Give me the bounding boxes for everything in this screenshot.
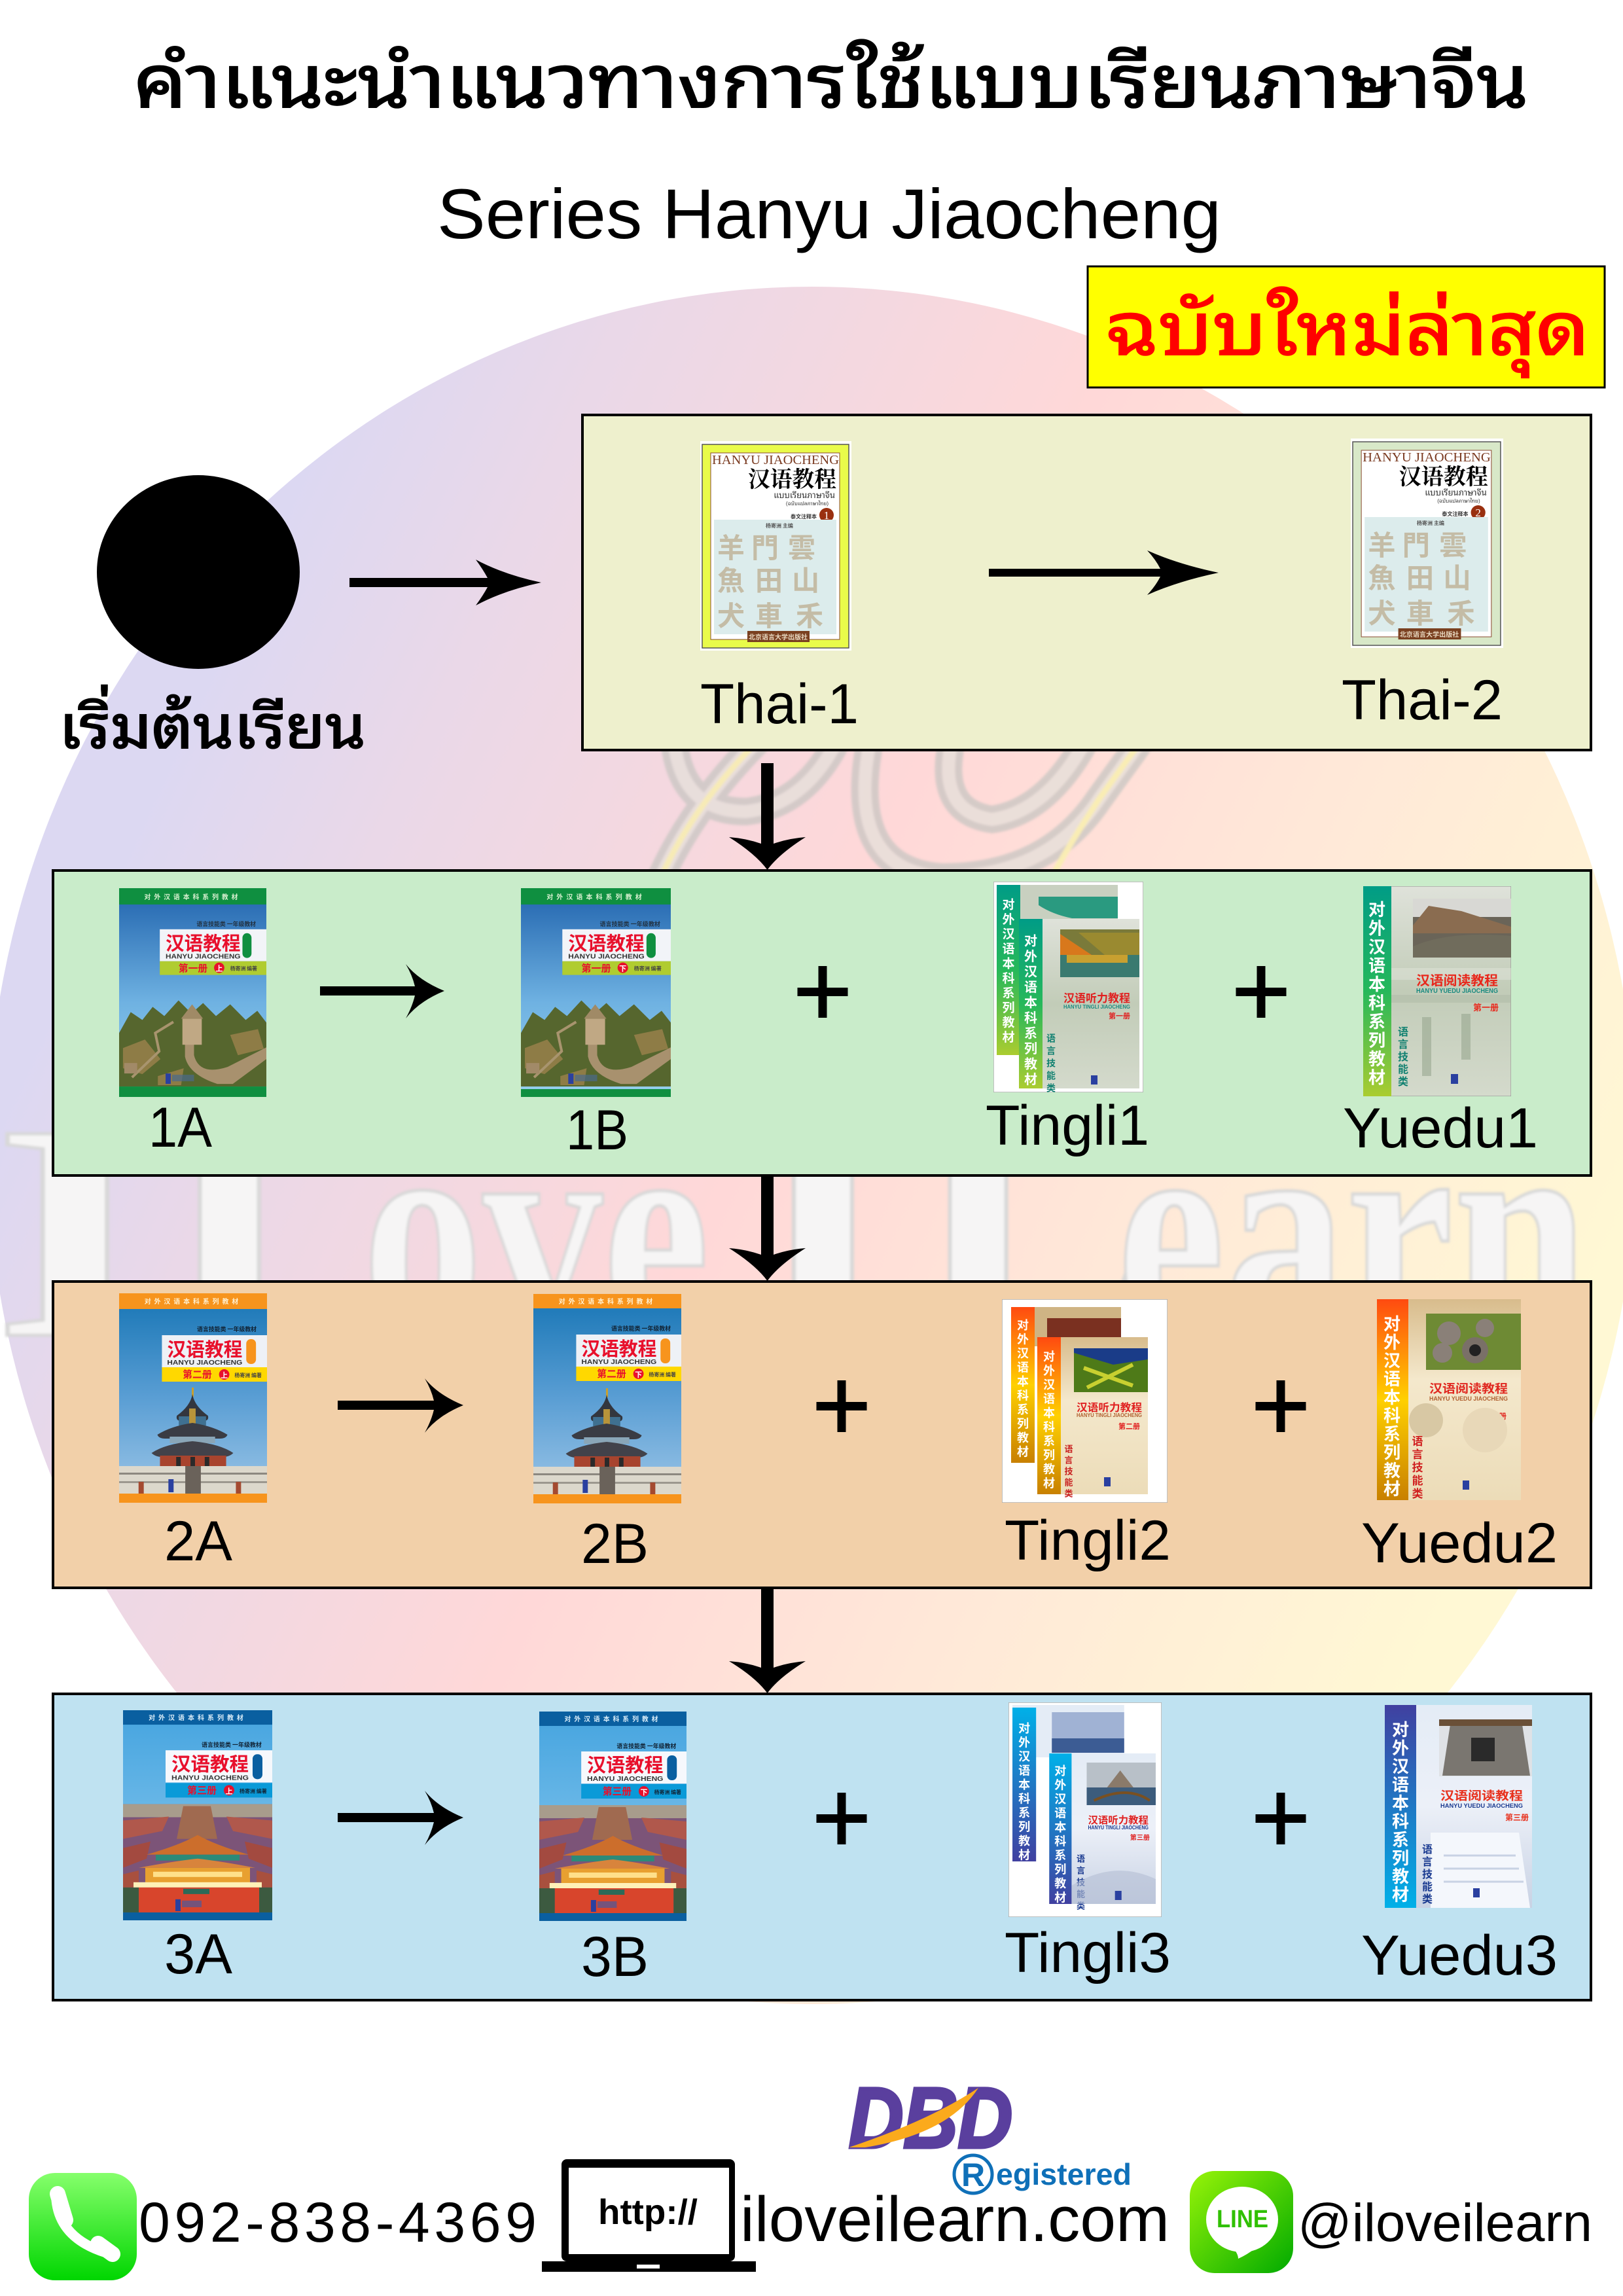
book: Tingli2 covers xyxy=(1002,1299,1168,1503)
book: Thai-1 cover: 雲 xyxy=(788,533,815,564)
book: Yuedu2 cover: 语言技能类 xyxy=(1410,1435,1425,1501)
book: Thai-2 cover xyxy=(1351,439,1503,648)
book: Thai-1 cover: 羊 xyxy=(717,533,745,564)
label: 1A: 1A xyxy=(149,1096,213,1159)
arrow: 1A to 1B xyxy=(320,964,444,1018)
book: 2A cover: 杨寄洲 编著 xyxy=(234,1372,262,1379)
arrow: Thai panel to level 1 xyxy=(729,763,806,870)
book: Tingli3 covers: 汉语听力教程 xyxy=(1088,1813,1149,1827)
book: 3B cover: 语言技能类 一年级教材 xyxy=(616,1742,676,1750)
book: 3B cover: 对外汉语本科系列教材 xyxy=(565,1713,661,1723)
book: Yuedu1 cover xyxy=(1363,886,1511,1096)
label: 3B: 3B xyxy=(581,1926,649,1988)
label: Yuedu1: Yuedu1 xyxy=(1343,1097,1538,1160)
book: Tingli2 covers: 第二册 xyxy=(1118,1421,1140,1431)
badge: latest edition xyxy=(1088,266,1605,387)
book: Tingli2 covers: HANYU TINGLI JIAOCHENG xyxy=(1077,1412,1142,1418)
icon: plus between 3B and Tingli3 xyxy=(817,1793,866,1844)
book: 3B cover: 杨寄洲 编著 xyxy=(654,1789,681,1796)
book: Thai-1 cover: 杨寄洲 主编 xyxy=(766,522,793,529)
book: 1A cover: HANYU JIAOCHENG xyxy=(166,954,241,961)
book: 1B cover: 对外汉语本科系列教材 xyxy=(546,891,645,901)
book: Yuedu1 cover: HANYU YUEDU JIAOCHENG xyxy=(1416,988,1498,995)
book: Tingli1 covers xyxy=(993,882,1143,1096)
label: Yuedu3: Yuedu3 xyxy=(1361,1924,1558,1987)
book: 2A cover: 对外汉语本科系列教材 xyxy=(145,1296,241,1306)
book: Thai-2 cover: 雲 xyxy=(1439,530,1467,561)
book: Thai-1 cover: 北京语言大学出版社 xyxy=(749,632,808,641)
book: 1B cover xyxy=(521,888,671,1097)
book: Tingli1 covers: 汉语听力教程 xyxy=(1063,989,1130,1005)
watermark: script logo xyxy=(661,740,1142,877)
book: Tingli2 covers: 汉语听力教程 xyxy=(1077,1399,1142,1414)
book: 3A cover: 对外汉语本科系列教材 xyxy=(149,1712,247,1722)
badge: latest edition: ฉบับใหม่ล่าสุด xyxy=(1106,286,1590,378)
book: Thai-2 cover: 田 xyxy=(1406,563,1434,594)
registered mark: egistered xyxy=(996,2157,1132,2191)
book: 2B cover xyxy=(533,1294,681,1503)
arrow: 3A to 3B xyxy=(338,1791,463,1845)
book: 1A cover: 汉语教程 xyxy=(166,929,241,956)
book: 1B cover: 杨寄洲 编著 xyxy=(634,965,662,973)
book: Tingli3 covers xyxy=(1008,1702,1162,1917)
book: Thai-1 cover: 田 xyxy=(755,565,783,596)
book: Thai-1 cover: 魚 xyxy=(717,565,745,596)
book: 1B cover: HANYU JIAOCHENG xyxy=(568,953,645,961)
book: Yuedu2 cover: HANYU YUEDU JIAOCHENG xyxy=(1429,1395,1508,1402)
book: Thai-2 cover: 山 xyxy=(1443,563,1471,594)
book: Thai-2 cover: 犬 xyxy=(1368,598,1396,629)
book: 3A cover: 上 xyxy=(226,1785,232,1796)
website: iloveilearn.com xyxy=(740,2183,1169,2255)
arrow: level 1 to level 2 xyxy=(729,1175,806,1281)
book: 1A cover: 对外汉语本科系列教材 xyxy=(145,892,241,901)
watermark: I Love I Learn: L xyxy=(913,1061,1157,1402)
watermark: I Love I Learn: ove xyxy=(363,1061,709,1402)
book: Tingli1 covers: 对外汉语本科系列教材 xyxy=(1000,898,1017,1045)
book: 1B cover: 第一册 xyxy=(581,961,611,975)
phone number: 092-838-4369 xyxy=(139,2191,537,2254)
book: Thai-2 cover: 羊 xyxy=(1368,530,1396,561)
book: 3A cover: 杨寄洲 编著 xyxy=(240,1787,267,1795)
logo: DBD: DBD xyxy=(849,2070,1012,2166)
book: 3A cover: 汉语教程 xyxy=(171,1749,249,1776)
panel: level 3 books xyxy=(53,1694,1591,2000)
book: Tingli2 covers: 对外汉语本科系列教材 xyxy=(1014,1319,1031,1460)
book: Thai-2 cover: 泰文注释本 xyxy=(1442,511,1469,518)
label: Tingli1: Tingli1 xyxy=(986,1094,1149,1157)
book: Thai-2 cover: 2 xyxy=(1475,507,1481,519)
book: Thai-2 cover: 汉语教程 xyxy=(1399,459,1488,491)
label: 1B: 1B xyxy=(566,1099,628,1162)
book: Thai-1 cover: HANYU JIAOCHENG xyxy=(712,453,839,467)
label: Thai-1: Thai-1 xyxy=(700,673,859,736)
book: 3B cover: HANYU JIAOCHENG xyxy=(587,1776,663,1783)
arrow: start to Thai panel xyxy=(349,560,541,605)
arrow: Thai-1 to Thai-2 xyxy=(989,550,1219,595)
book: 1A cover: 第一册 xyxy=(179,961,207,975)
book: 3A cover: 语言技能类 一年级教材 xyxy=(202,1740,262,1749)
book: Tingli3 covers: 对外汉语本科系列教材 xyxy=(1016,1722,1033,1863)
registered mark xyxy=(954,2155,1132,2193)
label: Tingli3: Tingli3 xyxy=(1005,1922,1171,1984)
book: Yuedu1 cover: 语言技能类 xyxy=(1395,1026,1411,1088)
book: Tingli1 covers: HANYU TINGLI JIAOCHENG xyxy=(1063,1003,1130,1010)
book: 3B cover xyxy=(539,1712,687,1921)
panel: level 2 books xyxy=(53,1282,1591,1588)
label: Yuedu2: Yuedu2 xyxy=(1361,1512,1558,1575)
arrow: level 2 to level 3 xyxy=(729,1588,806,1693)
registered mark: R xyxy=(961,2157,985,2193)
book: Yuedu3 cover xyxy=(1385,1705,1532,1908)
watermark: I Love I Learn: L xyxy=(161,1062,418,1402)
book: Thai-2 cover: 禾 xyxy=(1447,598,1475,629)
book: Tingli3 covers: 语言技能类 xyxy=(1075,1854,1087,1913)
icon: LINE: LINE xyxy=(1217,2206,1268,2233)
book: 2A cover: 第二册 xyxy=(183,1367,212,1381)
icon: LINE xyxy=(1190,2171,1293,2273)
book: 3A cover: 第三册 xyxy=(187,1783,217,1797)
book: 2B cover: 杨寄洲 编著 xyxy=(649,1371,676,1378)
icon: plus between Tingli3 and Yuedu3 xyxy=(1255,1793,1306,1844)
icon: plus between 1B and Tingli1 xyxy=(797,966,848,1018)
book: Thai-1 cover: 汉语教程 xyxy=(748,461,836,493)
book: Thai-1 cover: แบบเรียนภาษาจีน xyxy=(774,490,835,500)
book: Thai-1 cover: 門 xyxy=(751,533,779,564)
book: Thai-2 cover: 杨寄洲 主编 xyxy=(1417,520,1444,527)
book: Thai-2 cover: แบบเรียนภาษาจีน xyxy=(1425,488,1487,497)
panel: Thai books xyxy=(582,415,1591,750)
book: Thai-1 cover: 車 xyxy=(755,601,783,632)
subtitle: Series Hanyu Jiaocheng xyxy=(437,174,1221,253)
label: 2A: 2A xyxy=(164,1510,233,1573)
book: 1A cover: 上 xyxy=(216,963,223,974)
book: 2A cover xyxy=(119,1293,267,1503)
book: 1A cover: 杨寄洲 编著 xyxy=(230,965,257,973)
label: start learning: เริ่มต้นเรียน xyxy=(59,685,366,761)
book: 2B cover: 语言技能类 一年级教材 xyxy=(611,1324,671,1333)
book: Yuedu1 cover: 汉语阅读教程 xyxy=(1416,970,1498,989)
book: 1A cover: 语言技能类 一年级教材 xyxy=(196,920,256,928)
book: Yuedu3 cover: 对外汉语本科系列教材 xyxy=(1389,1721,1412,1904)
book: Yuedu2 cover: 汉语阅读教程 xyxy=(1429,1380,1508,1397)
book: Tingli3 covers: 对外汉语本科系列教材 xyxy=(1052,1765,1069,1905)
watermark: I Love I Learn: I xyxy=(749,1062,897,1402)
book: 2B cover: 汉语教程 xyxy=(581,1335,656,1361)
book: 2A cover: HANYU JIAOCHENG xyxy=(167,1359,242,1367)
book: Tingli1 covers: 第一册 xyxy=(1109,1011,1130,1021)
book: Thai-2 cover: HANYU JIAOCHENG xyxy=(1363,450,1491,465)
watermark: I Love I Learn xyxy=(0,1061,1588,1402)
book: 2A cover: 上 xyxy=(221,1370,228,1380)
book: Tingli2 covers: 对外汉语本科系列教材 xyxy=(1041,1350,1058,1491)
label: 3A: 3A xyxy=(164,1923,233,1986)
book: 2B cover: HANYU JIAOCHENG xyxy=(581,1359,656,1366)
book: 1A cover xyxy=(119,888,266,1097)
book: Yuedu1 cover: 对外汉语本科系列教材 xyxy=(1365,901,1389,1087)
label: Thai-2: Thai-2 xyxy=(1342,669,1503,732)
book: 2B cover: 第二册 xyxy=(597,1367,626,1380)
book: 1B cover: 语言技能类 一年级教材 xyxy=(600,920,660,928)
panel: level 1 books xyxy=(53,870,1591,1175)
title: คำแนะนำแนวทางการใช้แบบเรียนภาษาจีน xyxy=(134,39,1529,123)
label: 2B: 2B xyxy=(581,1513,649,1575)
icon: black start circle xyxy=(97,475,300,669)
book: Yuedu3 cover: 汉语阅读教程 xyxy=(1440,1787,1523,1804)
book: Yuedu3 cover: HANYU YUEDU JIAOCHENG xyxy=(1440,1803,1523,1809)
background gradient circle with watermark xyxy=(0,287,1623,2004)
book: Yuedu2 cover: 对外汉语本科系列教材 xyxy=(1380,1315,1404,1498)
book: 3A cover: HANYU JIAOCHENG xyxy=(171,1774,249,1782)
label: Tingli2: Tingli2 xyxy=(1005,1509,1171,1572)
start marker xyxy=(59,475,366,761)
footer contacts xyxy=(29,2070,1592,2280)
book: 2A cover: 语言技能类 一年级教材 xyxy=(197,1325,257,1333)
book: 2B cover: 对外汉语本科系列教材 xyxy=(559,1296,656,1306)
book: Thai-1 cover: 1 xyxy=(824,509,829,522)
book: Thai-2 cover: 門 xyxy=(1402,530,1430,561)
book: Tingli2 covers: 语言技能类 xyxy=(1063,1444,1075,1500)
book: Thai-2 cover: 車 xyxy=(1406,598,1434,629)
book: 1B cover: 下 xyxy=(619,963,626,974)
book: Tingli3 covers: 第三册 xyxy=(1130,1832,1150,1842)
book: Thai-1 cover xyxy=(700,441,851,651)
book: Thai-2 cover: (ฉบับแปลภาษาไทย) xyxy=(1437,497,1480,504)
book: 3B cover: 第三册 xyxy=(603,1784,632,1798)
book: Thai-1 cover: 泰文注释本 xyxy=(791,513,817,520)
book: Thai-1 cover: 禾 xyxy=(796,601,823,632)
book: 2A cover: 汉语教程 xyxy=(167,1335,242,1362)
icon: plus between Tingli2 and Yuedu2 xyxy=(1255,1380,1306,1432)
book: Tingli1 covers: 语言技能类 xyxy=(1044,1033,1058,1096)
book: Yuedu3 cover: 语言技能类 xyxy=(1419,1844,1435,1906)
book: Thai-2 cover: 北京语言大学出版社 xyxy=(1400,629,1459,639)
icon: laptop with http: http:// xyxy=(598,2193,698,2232)
icon: plus between 2B and Tingli2 xyxy=(817,1380,866,1432)
book: Tingli1 covers: 对外汉语本科系列教材 xyxy=(1021,934,1041,1088)
book: Yuedu2 cover xyxy=(1377,1299,1521,1501)
book: 2B cover: 下 xyxy=(635,1369,642,1380)
book: 3B cover: 下 xyxy=(640,1787,647,1797)
book: Yuedu1 cover: 第一册 xyxy=(1473,1001,1499,1013)
book: Thai-2 cover: 魚 xyxy=(1368,563,1396,594)
arrow: 2A to 2B xyxy=(338,1378,463,1433)
book: Thai-1 cover: (ฉบับแปลภาษาไทย) xyxy=(786,499,829,507)
book: 1B cover: 汉语教程 xyxy=(568,929,645,956)
book: 3B cover: 汉语教程 xyxy=(587,1751,663,1778)
icon: phone xyxy=(29,2173,137,2280)
book: Yuedu3 cover: 第三册 xyxy=(1505,1812,1529,1823)
book: Tingli3 covers: HANYU TINGLI JIAOCHENG xyxy=(1088,1825,1149,1831)
icon: laptop with http xyxy=(542,2159,756,2272)
LINE id: @iloveilearn xyxy=(1298,2193,1592,2253)
book: Yuedu2 cover: 第二册 xyxy=(1483,1410,1507,1422)
book: 3A cover xyxy=(123,1710,272,1920)
book: Thai-1 cover: 犬 xyxy=(717,601,745,632)
book: Thai-1 cover: 山 xyxy=(792,565,819,596)
icon: plus between Tingli1 and Yuedu1 xyxy=(1236,966,1287,1018)
